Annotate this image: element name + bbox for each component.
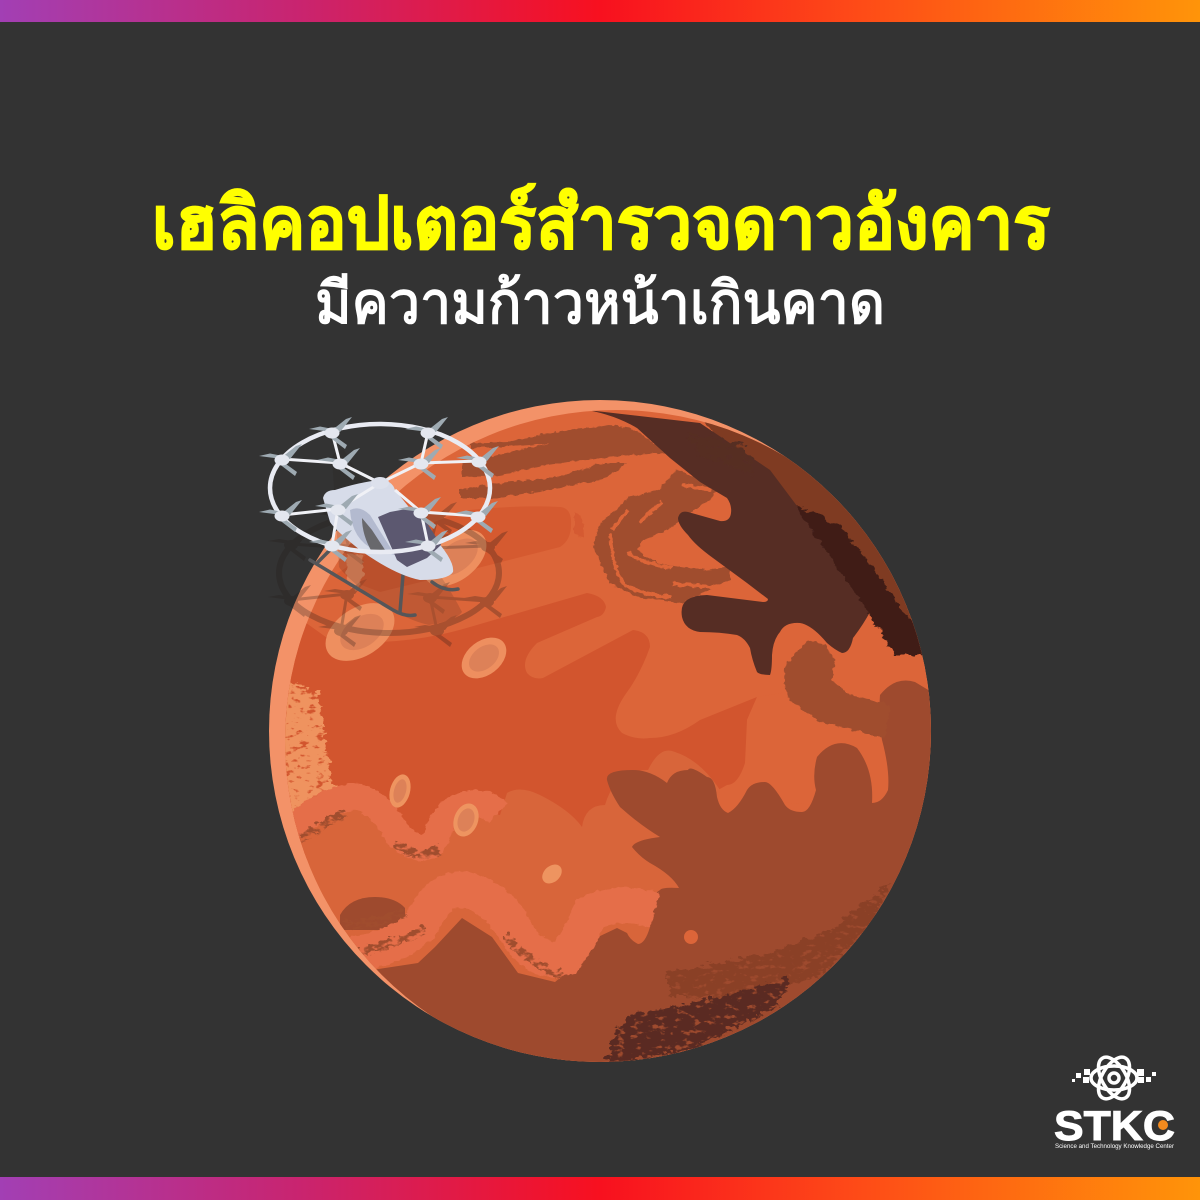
darker base region [260,590,757,860]
logo wordmark: STKC [1054,1102,1175,1149]
bottom gradient bar [0,1177,1200,1200]
ring frame [270,424,490,552]
rotors [259,417,499,562]
dark half crater [340,897,405,930]
title: เฮลิคอปเตอร์สำรวจดาวอังคาร [152,183,1050,264]
logo dot [1158,1120,1168,1130]
top gradient bar [0,0,1200,22]
dark upper-right region [587,410,870,675]
upper wavy stripe [292,797,498,848]
swirl flecks [610,485,730,597]
bottom stripes [665,883,890,997]
craters [315,518,698,944]
dark patch at top of band [722,438,754,459]
rough band at edge [704,422,922,652]
upper dark band [335,506,571,592]
logo squares [1072,1069,1156,1083]
skids [310,535,458,615]
side window [362,518,387,553]
small fleck [574,512,584,538]
left pale patch [285,682,338,814]
top stripes [460,425,667,498]
swirl [593,470,730,603]
struts [282,432,479,545]
logo atom [1091,1052,1137,1104]
logo STKC [1054,1052,1175,1150]
helicopter shadow [268,450,508,647]
darkest streak [795,505,935,655]
stripe flecks [300,815,560,975]
right swirl [784,640,890,738]
hub [371,477,389,489]
lower dark region [376,680,931,1062]
planet Mars [260,395,950,1080]
lower wavy stripe [332,889,655,959]
helicopter [259,417,499,615]
fuselage [323,480,453,580]
logo tagline: Science and Technology Knowledge Center [1055,1144,1174,1150]
subtitle: มีความก้าวหน้าเกินคาด [315,271,885,336]
lower light band [300,750,720,937]
pale patch under helicopter [346,553,364,592]
windshield [378,507,441,567]
